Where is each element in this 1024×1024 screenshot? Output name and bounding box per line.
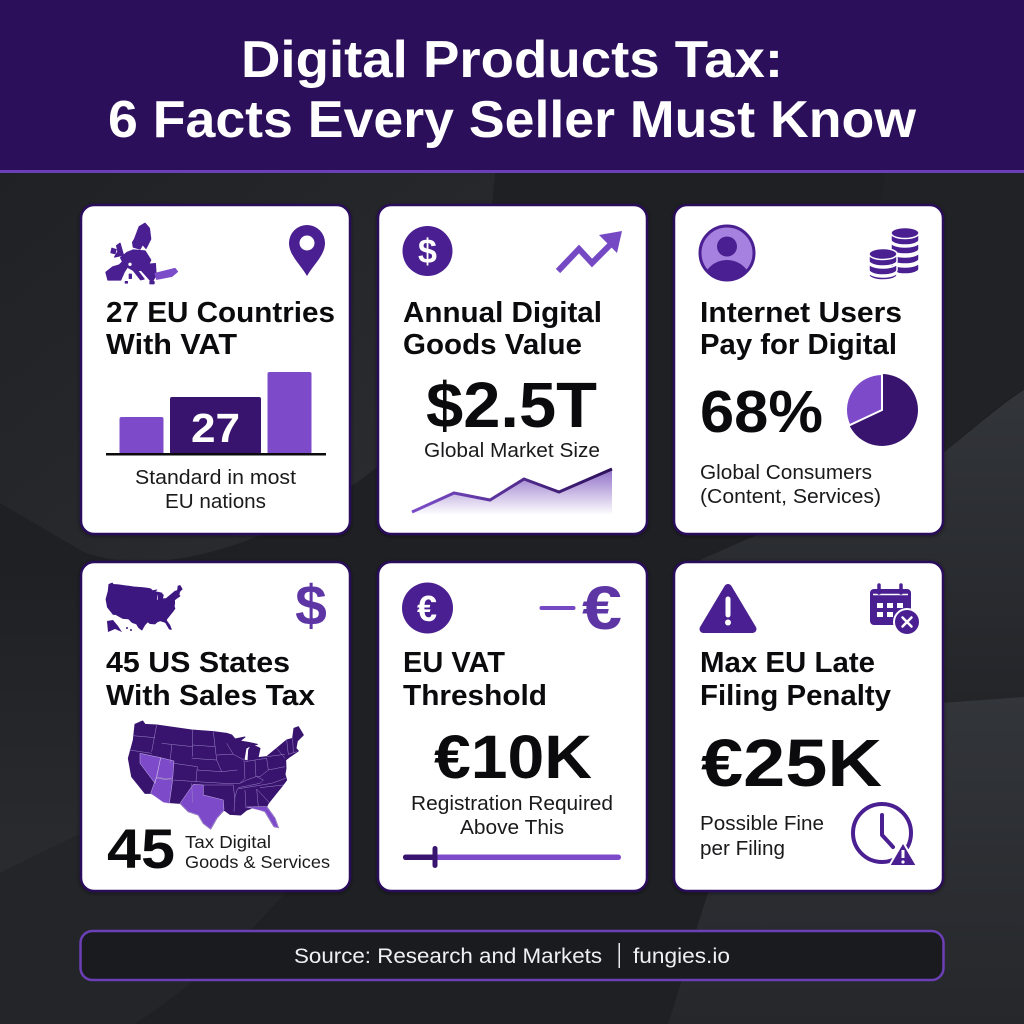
icon: coin stacks xyxy=(869,228,919,280)
icon: dash and euro sign xyxy=(540,574,622,642)
caption: Registration Required xyxy=(411,793,613,815)
heading: Max EU Late xyxy=(700,647,875,679)
title xyxy=(108,31,917,149)
caption xyxy=(411,793,613,839)
heading: 45 US States xyxy=(106,647,290,679)
icon: user avatar xyxy=(698,224,756,282)
source footer xyxy=(80,931,944,980)
heading: Filing Penalty xyxy=(700,680,891,712)
caption: Above This xyxy=(460,817,564,839)
source footer: fungies.io xyxy=(633,945,730,968)
caption: Global Consumers xyxy=(700,462,872,484)
bar chart: 27 xyxy=(191,405,240,451)
panel: annual digital goods value xyxy=(378,205,647,534)
heading xyxy=(106,297,335,361)
panel: 45 US states with sales tax xyxy=(81,562,350,891)
icon: Europe map xyxy=(106,223,178,284)
heading: With VAT xyxy=(106,329,237,361)
caption: Standard in most xyxy=(135,467,296,489)
icon: dollar sign: $ xyxy=(295,574,327,638)
heading: With Sales Tax xyxy=(106,680,315,712)
caption xyxy=(700,813,824,860)
caption xyxy=(185,832,330,872)
heading: Internet Users xyxy=(700,297,902,329)
caption: Tax Digital xyxy=(185,832,271,852)
stat: 45 xyxy=(107,817,175,880)
icon: clock with warning xyxy=(853,804,917,866)
caption: Goods & Services xyxy=(185,852,330,872)
threshold slider xyxy=(403,846,621,868)
line chart xyxy=(412,469,612,515)
caption xyxy=(135,467,296,513)
icon: euro coin: € xyxy=(417,588,437,629)
heading xyxy=(106,647,315,712)
header banner xyxy=(0,0,1024,173)
pie chart xyxy=(846,374,918,446)
stat: $2.5T xyxy=(426,369,597,441)
caption: EU nations xyxy=(165,491,266,513)
heading xyxy=(700,647,891,712)
icon: dollar coin: $ xyxy=(418,233,437,271)
caption: Global Market Size xyxy=(424,440,600,462)
icon: dash and euro sign: € xyxy=(582,574,622,642)
US states map xyxy=(128,721,303,829)
stat: €25K xyxy=(701,726,882,801)
stat: €10K xyxy=(434,723,592,791)
caption xyxy=(700,462,881,508)
title: 6 Facts Every Seller Must Know xyxy=(108,91,917,149)
panel: 27 EU countries with VAT xyxy=(81,205,350,534)
heading: EU VAT xyxy=(403,647,505,679)
source footer: Source: Research and Markets xyxy=(294,945,602,968)
title: Digital Products Tax: xyxy=(241,31,783,89)
heading xyxy=(403,647,547,712)
panel: EU VAT threshold xyxy=(378,562,647,891)
heading xyxy=(700,297,902,361)
heading: Pay for Digital xyxy=(700,329,897,361)
panel: internet users pay for digital xyxy=(674,205,943,534)
stat: 68% xyxy=(700,379,823,445)
icon: warning triangle xyxy=(704,588,752,629)
icon: rising arrow xyxy=(558,231,622,271)
icon: calendar with cross xyxy=(870,585,920,635)
heading: 27 EU Countries xyxy=(106,297,335,329)
caption: per Filing xyxy=(700,838,785,860)
icon: location pin xyxy=(289,225,325,276)
icon: dollar coin xyxy=(402,226,452,276)
heading: Goods Value xyxy=(403,329,582,361)
heading xyxy=(403,297,602,361)
icon: euro coin xyxy=(402,582,453,634)
bar chart xyxy=(106,372,326,456)
caption: Possible Fine xyxy=(700,813,824,835)
panel: max EU late filing penalty xyxy=(674,562,943,891)
icon: small US map xyxy=(106,583,182,632)
caption: (Content, Services) xyxy=(700,486,881,508)
heading: Threshold xyxy=(403,680,547,712)
heading: Annual Digital xyxy=(403,297,602,329)
